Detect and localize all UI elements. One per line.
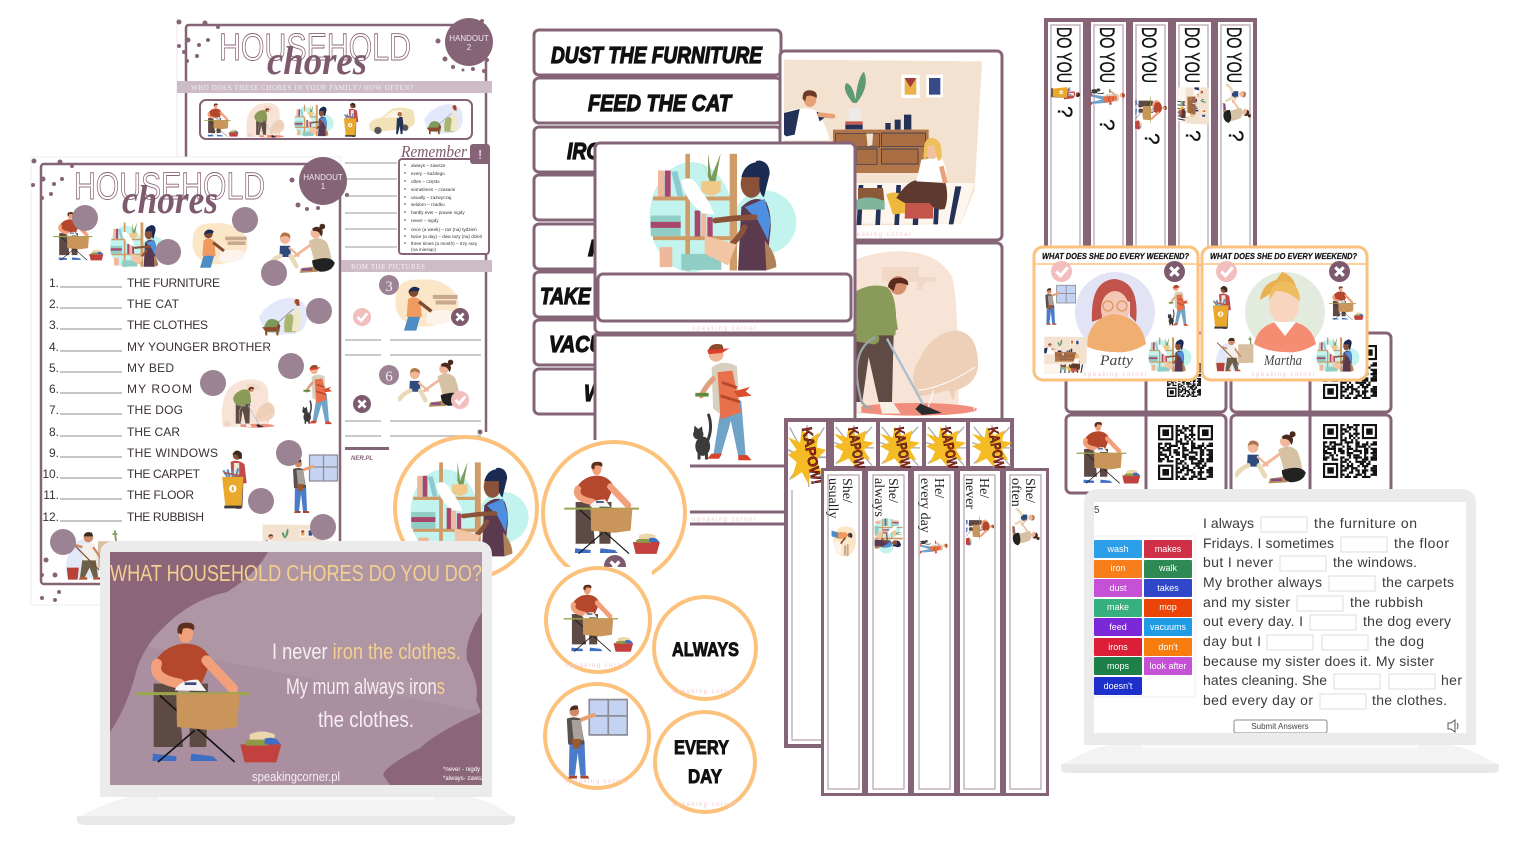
gap fill text: out every day. I bbox=[1203, 613, 1303, 629]
exercise picture 6: 6 bbox=[385, 369, 393, 385]
word bank: mops bbox=[1107, 661, 1130, 671]
instruction band: WHO DOES THESE CHORES IN YOUR FAMILY? HOW OFTEN? bbox=[191, 84, 413, 92]
matching exercise list: THE DOG bbox=[127, 403, 183, 417]
matching exercise list: MY ROOM bbox=[127, 382, 192, 396]
word strips with frequency prompts, front row: He/ bbox=[976, 478, 991, 498]
picture card: bedroom tidying: speaking corner bbox=[847, 232, 913, 238]
matching exercise list: THE FURNITURE bbox=[127, 276, 220, 290]
activity card: Patty: speaking corner bbox=[1083, 372, 1149, 378]
callout: remember box: three times (a month) – trzy razy bbox=[411, 241, 478, 246]
circle card: every day: EVERY bbox=[674, 738, 729, 759]
slide footnote: *never - nigdy bbox=[443, 767, 480, 773]
word bank: doesn't bbox=[1104, 681, 1133, 691]
gap fill text: and my sister bbox=[1203, 594, 1290, 610]
gap fill text: the windows. bbox=[1333, 554, 1417, 570]
picture card: dusting: speaking corner bbox=[692, 326, 758, 332]
exercise picture 6 bbox=[353, 360, 469, 413]
callout: remember box: (na miesiąc) bbox=[411, 247, 436, 252]
word strips with comic burst, back row: KAPOW bbox=[891, 426, 914, 470]
gap fill text: I always bbox=[1203, 515, 1254, 531]
phrase cards stack: TAKE OUT THE RUBBISH bbox=[540, 283, 772, 309]
circle card: dusting bbox=[395, 437, 537, 579]
circle card: ironing small: speaking corner bbox=[565, 663, 631, 669]
heading: household chores bbox=[74, 166, 265, 222]
callout: remember box: once (a week) – raz (na) tydzień bbox=[411, 227, 477, 232]
card edges bbox=[690, 466, 785, 524]
callout: remember box: ! bbox=[478, 147, 482, 162]
matching exercise list bbox=[42, 276, 271, 524]
matching exercise list: THE RUBBISH bbox=[127, 510, 204, 524]
writing lines bbox=[345, 163, 397, 247]
question strips: do you: ? bbox=[1095, 119, 1118, 131]
word bank: mop bbox=[1159, 602, 1177, 612]
slide footer: speakingcorner.pl bbox=[252, 769, 340, 784]
instruction band 2: ROM THE PICTURES bbox=[351, 263, 425, 271]
slide footnote: *always- zawsze bbox=[443, 776, 488, 782]
word bank: takes bbox=[1157, 583, 1179, 593]
callout: remember box: every – każdego bbox=[411, 171, 445, 176]
matching exercise list: THE FLOOR bbox=[127, 488, 194, 502]
word strips with frequency prompts, front row: often bbox=[1008, 478, 1023, 507]
instruction band bbox=[177, 81, 492, 93]
word bank: wash bbox=[1106, 544, 1129, 554]
heading: household chores: chores bbox=[267, 38, 367, 83]
matching exercise list: 12. bbox=[42, 510, 59, 524]
laptop: presentation slide bbox=[77, 541, 515, 825]
word strips with frequency prompts, front row: every day bbox=[917, 478, 932, 533]
submit button: Submit Answers bbox=[1251, 722, 1309, 731]
circle card: ironing large bbox=[543, 442, 685, 584]
panel: handout 2 worksheet: NER.PL bbox=[351, 456, 373, 462]
picture card: dusting bbox=[595, 143, 855, 333]
exercise picture 3: 3 bbox=[385, 279, 393, 295]
gap fill text: the dog every bbox=[1363, 613, 1451, 629]
gap fill text: the dog bbox=[1375, 633, 1424, 649]
word strips with frequency prompts, front row bbox=[821, 468, 1049, 796]
callout: remember box: never – nigdy bbox=[411, 218, 439, 223]
matching exercise list: 9. bbox=[49, 446, 59, 460]
slide sentences: I never iron the clothes. bbox=[272, 639, 461, 664]
badge: handout 1 bbox=[299, 157, 347, 205]
callout: remember box: Remember bbox=[400, 142, 467, 161]
callout: remember box: sometimes – czasami bbox=[411, 187, 455, 192]
word strips with comic burst, back row: KAPOW bbox=[845, 426, 868, 470]
word strips with comic burst, back row: KAPOW bbox=[938, 426, 961, 470]
circle card: every day bbox=[655, 712, 755, 812]
question strips: do you: ? bbox=[1224, 130, 1247, 142]
callout: remember box: often – często bbox=[411, 179, 440, 184]
matching exercise list: THE CAT bbox=[127, 297, 180, 311]
picture card: feeding the cat bbox=[595, 335, 855, 466]
slide footnote bbox=[443, 766, 482, 782]
picture card: vacuuming bbox=[780, 243, 1002, 443]
phrase cards stack: MAKE MY BED bbox=[588, 235, 788, 261]
matching exercise list: 1. bbox=[49, 276, 59, 290]
phrase cards stack: VACUUM THE CARPET bbox=[549, 331, 769, 357]
picture card: bedroom tidying bbox=[780, 51, 1002, 240]
word bank: walk bbox=[1158, 563, 1177, 573]
instruction band 2 bbox=[340, 260, 492, 272]
heading: household chores bbox=[219, 27, 411, 83]
word bank: make bbox=[1107, 602, 1129, 612]
text: speaking corner bbox=[692, 517, 758, 523]
matching exercise list: THE CARPET bbox=[127, 467, 201, 481]
word bank: vacuums bbox=[1150, 622, 1187, 632]
matching exercise list: MY YOUNGER BROTHER bbox=[127, 340, 271, 354]
word bank: makes bbox=[1155, 544, 1182, 554]
question strips: do you: ? bbox=[1053, 106, 1076, 118]
badge: handout 2 bbox=[445, 18, 493, 66]
callout: remember box bbox=[399, 142, 490, 254]
badge: handout 1: HANDOUT bbox=[303, 173, 343, 182]
laptop: fill in the blanks exercise: 5 bbox=[1094, 505, 1100, 516]
word strips with frequency prompts, front row: She/ bbox=[839, 478, 854, 503]
gap fill text: the furniture on bbox=[1314, 515, 1417, 531]
matching exercise list: 10. bbox=[42, 467, 59, 481]
activity card: Patty: WHAT DOES SHE DO EVERY WEEKEND? bbox=[1042, 252, 1189, 261]
submit button bbox=[1234, 720, 1327, 733]
panel: handout 2 worksheet bbox=[176, 18, 493, 462]
gap fill text: the clothes. bbox=[1372, 692, 1447, 708]
slide sentences: the clothes. bbox=[318, 707, 414, 732]
matching exercise list: 4. bbox=[49, 340, 59, 354]
circle card: every day: speaking corner bbox=[672, 802, 738, 808]
callout: remember box: always – zawsze bbox=[411, 163, 446, 168]
circle card: always bbox=[654, 597, 756, 699]
word bank: iron bbox=[1110, 563, 1126, 573]
callout: remember box: usually – zazwyczaj bbox=[411, 195, 451, 200]
circle card: ironing small bbox=[544, 567, 652, 674]
word bank: irons bbox=[1108, 642, 1128, 652]
badge: handout 1: 1 bbox=[321, 182, 326, 191]
matching exercise list: 7. bbox=[49, 403, 59, 417]
slide sentences: My mum always irons bbox=[286, 674, 445, 699]
gap fill text: her bbox=[1441, 672, 1462, 688]
activity card: Patty bbox=[1034, 247, 1198, 380]
gap fill text: the floor bbox=[1394, 535, 1449, 551]
QR cards bbox=[1066, 333, 1391, 493]
gap fill text: bed every day or bbox=[1203, 692, 1313, 708]
word strips with frequency prompts, front row: She/ bbox=[885, 478, 900, 503]
gap fill text: because my sister does it. My sister bbox=[1203, 653, 1434, 669]
gap fill text: Fridays. I sometimes bbox=[1203, 535, 1334, 551]
phrase cards stack: DUST THE FURNITURE bbox=[551, 42, 763, 68]
panel: handout 1 worksheet bbox=[31, 157, 349, 605]
matching exercise list: 6. bbox=[49, 382, 59, 396]
word bank bbox=[1090, 536, 1195, 697]
matching exercise list: THE CAR bbox=[127, 425, 180, 439]
word bank: look after bbox=[1149, 661, 1187, 671]
question strips: do you: DO YOU bbox=[1222, 27, 1245, 83]
slide illustration: ironing bbox=[136, 623, 281, 762]
slide sentences bbox=[274, 643, 460, 727]
callout: remember box: seldom – rzadko bbox=[411, 202, 445, 207]
word strips with frequency prompts, front row: never bbox=[962, 478, 977, 509]
gap fill text: the carpets bbox=[1382, 574, 1454, 590]
icon: speaker bbox=[1448, 720, 1458, 732]
question strips: do you: DO YOU bbox=[1180, 27, 1203, 83]
question strips: do you: ? bbox=[1181, 130, 1204, 142]
circle card: window cleaning: speaking corner bbox=[564, 779, 630, 785]
matching exercise list: MY BED bbox=[127, 361, 174, 375]
gap fill text: hates cleaning. She bbox=[1203, 672, 1327, 688]
circle card: always: ALWAYS bbox=[672, 640, 739, 661]
activity card: Martha: speaking corner bbox=[1251, 372, 1317, 378]
question strips: do you: DO YOU bbox=[1052, 27, 1075, 83]
gap fill text: but I never bbox=[1203, 554, 1273, 570]
matching exercise list: 2. bbox=[49, 297, 59, 311]
picture strip bbox=[200, 100, 472, 139]
heading: household chores: HOUSEHOLD bbox=[219, 27, 411, 69]
circle card: always: speaking corner bbox=[672, 689, 738, 695]
heading: household chores: HOUSEHOLD bbox=[74, 166, 265, 208]
activity card: Martha bbox=[1202, 247, 1367, 380]
word bank: dust bbox=[1109, 583, 1127, 593]
matching pictures bbox=[50, 205, 338, 580]
phrase cards stack bbox=[534, 30, 788, 414]
badge: handout 2: 2 bbox=[467, 43, 472, 52]
question strips: do you: DO YOU bbox=[1137, 27, 1160, 83]
slide title: WHAT HOUSEHOLD CHORES DO YOU DO? bbox=[110, 560, 482, 586]
exercise picture 3 bbox=[353, 275, 469, 331]
gap fill text bbox=[1203, 515, 1462, 709]
question strips: do you: DO YOU bbox=[1095, 27, 1118, 83]
word strips with comic burst, back row bbox=[786, 420, 1012, 746]
circle card: window cleaning bbox=[545, 684, 649, 788]
word strips with frequency prompts, front row: He/ bbox=[931, 478, 946, 498]
heading: household chores: chores bbox=[122, 177, 218, 222]
matching exercise list: THE CLOTHES bbox=[127, 318, 208, 332]
word strips with frequency prompts, front row: usually bbox=[825, 478, 840, 518]
matching exercise list: 3. bbox=[49, 318, 59, 332]
callout: remember box: twice (a day) – dwa razy (na) dzień bbox=[411, 234, 483, 239]
activity card: Martha: WHAT DOES SHE DO EVERY WEEKEND? bbox=[1210, 252, 1357, 261]
gap fill text: My brother always bbox=[1203, 574, 1322, 590]
activity card: Martha: Martha bbox=[1263, 353, 1302, 369]
activity card: Patty: Patty bbox=[1099, 353, 1133, 369]
matching exercise list: 11. bbox=[43, 488, 59, 502]
matching exercise list: THE WINDOWS bbox=[127, 446, 218, 460]
matching exercise list: 8. bbox=[49, 425, 59, 439]
laptop: fill in the blanks exercise bbox=[1061, 489, 1499, 773]
callout: remember box: hardly ever – prawie nigdy bbox=[411, 210, 465, 215]
phrase cards stack: WALK THE DOG bbox=[584, 380, 744, 406]
word bank: don't bbox=[1158, 642, 1178, 652]
phrase cards stack: FEED THE CAT bbox=[588, 90, 733, 116]
phrase cards stack: IRON THE CLOTHES bbox=[567, 138, 758, 164]
matching exercise list: 5. bbox=[49, 361, 59, 375]
word bank: feed bbox=[1109, 622, 1127, 632]
circle card: every day: DAY bbox=[688, 767, 722, 788]
word strips with comic burst, back row: KAPOW bbox=[985, 426, 1008, 470]
word strips with frequency prompts, front row: always bbox=[871, 478, 886, 517]
gap fill text: day but I bbox=[1203, 633, 1261, 649]
question strips: do you bbox=[1044, 18, 1257, 265]
question strips: do you: ? bbox=[1140, 133, 1163, 145]
badge: handout 2: HANDOUT bbox=[449, 34, 489, 43]
word strips with frequency prompts, front row: She/ bbox=[1022, 478, 1037, 503]
gap fill text: the rubbish bbox=[1350, 594, 1423, 610]
word strips with comic burst, back row: KAPOW! bbox=[799, 426, 825, 486]
